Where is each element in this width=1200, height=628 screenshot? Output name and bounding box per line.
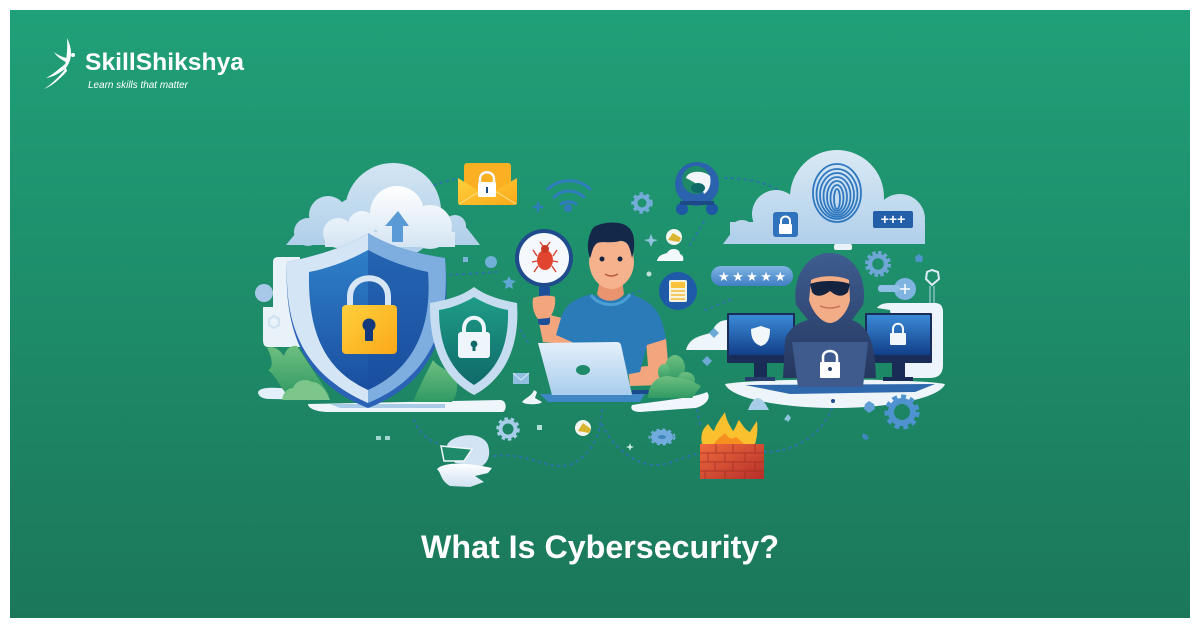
- password tile: [873, 211, 913, 228]
- arm holding magnifier: [538, 315, 575, 345]
- bottom gear: [498, 418, 518, 440]
- icon: envelope with lock: [458, 163, 517, 205]
- forearm: [628, 338, 668, 386]
- bricks: [700, 444, 764, 479]
- lock tile: [773, 212, 798, 237]
- title: What Is Cybersecurity?: [421, 529, 779, 565]
- logo wordmark: SkillShikshya: [85, 49, 245, 76]
- neck: [597, 280, 624, 301]
- white backing panel behind shield: [255, 257, 300, 347]
- mail icon and diamonds: [513, 328, 719, 384]
- logo tagline: Learn skills that matter: [88, 80, 189, 91]
- password pill with stars: ★★★★★: [718, 269, 786, 284]
- flat gear: [650, 430, 674, 444]
- padlock: [458, 318, 490, 358]
- small sparkle decorations: [463, 234, 658, 289]
- icon: small cloud with badge: [657, 229, 683, 261]
- bug: [532, 242, 558, 272]
- icon: document badge: [659, 272, 697, 310]
- lens: [515, 229, 573, 287]
- right monitor with lock: [865, 313, 932, 381]
- big blue shield with padlock: [287, 233, 447, 408]
- icon: wifi: [534, 181, 590, 212]
- fingerprint: [813, 164, 861, 222]
- magnifying glass with bug: [515, 229, 573, 325]
- handle: [539, 287, 550, 300]
- icon: skull and crossbones badge: [675, 162, 719, 215]
- dotted connector lines: [414, 178, 833, 466]
- left cloud behind hacker: [686, 320, 728, 350]
- gear, key and octagon icons: [866, 252, 939, 303]
- person with laptop: [538, 223, 668, 402]
- flames: [701, 412, 757, 444]
- logo icon: leaping figure: [44, 38, 75, 89]
- laptop lid: [538, 342, 632, 395]
- laptop base: [540, 392, 646, 402]
- left cloud with upload arrow: [286, 163, 480, 259]
- eyes and mouth: [600, 256, 604, 262]
- left platform: [258, 388, 506, 412]
- hacker laptop with lock: [792, 342, 868, 387]
- logo: [44, 38, 245, 91]
- hacker platform: [725, 380, 945, 408]
- t-shirt: [556, 294, 666, 380]
- hooded hacker: [783, 253, 876, 378]
- firewall with flames: [700, 412, 764, 479]
- left monitor with shield: [727, 313, 795, 381]
- hair: [588, 223, 634, 258]
- white panel behind right monitor: [877, 303, 943, 378]
- password tile: +++: [881, 211, 905, 227]
- upload arrow: [385, 211, 409, 242]
- small bottom decorations: [376, 420, 634, 451]
- leaves: [267, 346, 457, 402]
- password pill with stars: [711, 266, 793, 286]
- icon: gear top centre: [632, 194, 652, 212]
- hand: [533, 296, 555, 319]
- right fingerprint cloud: [723, 150, 925, 250]
- big gear bottom right: [886, 396, 918, 428]
- plant and platform beside laptop: [522, 355, 709, 412]
- broken monitor icon: [437, 435, 492, 487]
- small cloud and diamonds below platform: [748, 398, 875, 440]
- padlock: [342, 278, 397, 354]
- small green shield with padlock: [430, 287, 517, 395]
- face: [589, 239, 634, 289]
